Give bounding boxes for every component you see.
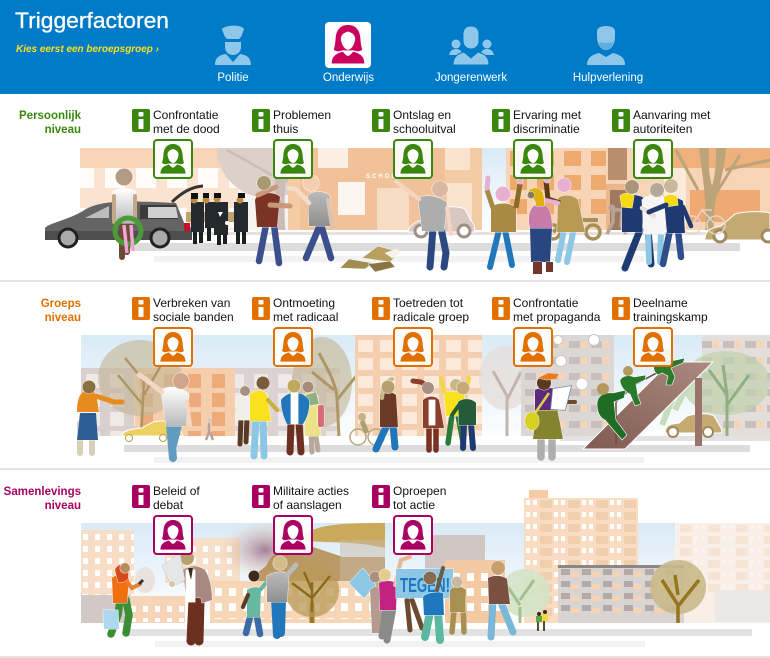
child and man <box>243 556 296 635</box>
woman in blue skirt <box>77 380 122 453</box>
man with wreath <box>112 168 141 257</box>
hearse <box>45 186 203 247</box>
scene backdrop: street 1: SCHOOL <box>366 174 404 180</box>
small pedestrians <box>536 610 548 631</box>
level heading: Samenlevings <box>4 486 81 498</box>
trigger: Confrontatie met propaganda: Confrontatie <box>513 296 579 310</box>
level heading: niveau <box>45 312 81 324</box>
trigger: Confrontatie met de dood: Confrontatie <box>153 108 219 122</box>
trigger: Ontslag en schooluitval: schooluitval <box>393 122 456 136</box>
trigger: Problemen thuis <box>252 108 331 178</box>
protesters with banner <box>349 557 466 640</box>
trigger: Confrontatie met propaganda: met propaganda <box>513 310 601 324</box>
scene backdrop: city <box>81 490 770 630</box>
trigger: Ervaring met discriminatie: Ervaring met <box>513 108 582 122</box>
row separators <box>0 280 770 658</box>
icon: Jongerenwerk <box>449 26 494 65</box>
trigger: Toetreden tot radicale groep <box>372 296 469 366</box>
police with detainee <box>620 179 691 268</box>
trigger: Problemen thuis: thuis <box>273 122 298 136</box>
trigger: Toetreden tot radicale groep: radicale groep <box>393 310 469 324</box>
trigger: Militaire acties of aanslagen <box>252 484 349 554</box>
trigger: Ontmoeting met radicaal: met radicaal <box>273 310 338 324</box>
waving man from behind <box>139 373 190 458</box>
road bands <box>124 436 770 463</box>
trigger: Oproepen tot actie: Oproepen <box>393 484 446 498</box>
label Politie: Politie <box>217 72 249 84</box>
header bar <box>0 0 770 94</box>
icon: Politie <box>215 26 251 65</box>
woman with phone <box>103 563 143 634</box>
parked cars and bikes <box>408 204 770 242</box>
trigger: Aanvaring met autoriteiten: autoriteiten <box>633 122 692 136</box>
label Jongerenwerk: Jongerenwerk <box>435 72 507 84</box>
scene backdrop: street 1 <box>80 148 770 244</box>
icon: Hulpverlening <box>587 26 625 65</box>
road bands <box>125 629 752 647</box>
instruction: Kies eerst een beroepsgroep › <box>16 44 159 55</box>
group: joining the radicals <box>376 378 476 450</box>
climbers with ropes <box>597 349 685 444</box>
trigger: Oproepen tot actie <box>372 484 446 554</box>
trigger: Beleid of debat: Beleid of <box>153 484 200 498</box>
waving man <box>396 181 451 267</box>
trigger: Ontslag en schooluitval: Ontslag en <box>393 108 451 122</box>
scene backdrop: street 2 <box>81 335 770 445</box>
icon: Onderwijs selected <box>325 22 371 68</box>
level heading: niveau <box>45 124 81 136</box>
label Onderwijs: Onderwijs <box>323 72 374 84</box>
trigger: Ervaring met discriminatie: discriminatie <box>513 122 580 136</box>
trigger: Toetreden tot radicale groep: Toetreden tot <box>393 296 464 310</box>
trigger: Ervaring met discriminatie <box>492 108 582 178</box>
trigger: Problemen thuis: Problemen <box>273 108 331 122</box>
trigger: Verbreken van sociale banden: Verbreken van <box>153 296 230 310</box>
panel: groeps niveau <box>41 296 770 463</box>
panel: persoonlijk niveau <box>19 108 770 274</box>
trigger: Aanvaring met autoriteiten <box>612 108 711 178</box>
trigger: Ontmoeting met radicaal: Ontmoeting <box>273 296 335 310</box>
panel: samenlevings niveau <box>4 484 770 647</box>
trigger: Beleid of debat: debat <box>153 498 184 512</box>
man on phone <box>488 561 513 637</box>
trigger: Verbreken van sociale banden <box>132 296 234 366</box>
level heading: Groeps <box>41 298 81 310</box>
title: Triggerfactoren <box>15 8 169 33</box>
pallbearers <box>186 193 248 245</box>
level heading: Persoonlijk <box>19 110 82 122</box>
banner text: TEGEN! <box>400 575 450 597</box>
man reading newspaper <box>162 551 212 641</box>
group: discrimination scene <box>487 177 585 274</box>
trigger: Ontslag en schooluitval <box>372 108 456 178</box>
trigger: Confrontatie met de dood: met de dood <box>153 122 220 136</box>
person handing out propaganda <box>525 373 575 457</box>
cars and small figures <box>122 413 722 445</box>
road bands <box>133 243 740 262</box>
trigger: Verbreken van sociale banden: sociale banden <box>153 310 234 324</box>
trigger: Deelname trainingskamp: trainingskamp <box>633 310 708 324</box>
trigger: Militaire acties of aanslagen: of aanslagen <box>273 498 342 512</box>
trigger: Aanvaring met autoriteiten: Aanvaring met <box>633 108 711 122</box>
level heading: niveau <box>45 500 81 512</box>
trigger: Ontmoeting met radicaal <box>252 296 338 366</box>
trigger: Deelname trainingskamp <box>612 296 708 366</box>
trigger: Militaire acties of aanslagen: Militaire acties <box>273 484 349 498</box>
trigger: Beleid of debat <box>132 484 200 554</box>
training ramp <box>583 362 713 449</box>
trigger: Oproepen tot actie: tot actie <box>393 498 435 512</box>
trigger: Confrontatie met propaganda <box>492 296 601 366</box>
scattered cardboard <box>340 246 400 272</box>
group: meeting a radical <box>236 376 324 456</box>
floating message bubbles <box>554 334 600 390</box>
trigger: Confrontatie met de dood <box>132 108 220 178</box>
trigger: Deelname trainingskamp: Deelname <box>633 296 688 310</box>
label Hulpverlening: Hulpverlening <box>573 72 643 84</box>
arguing man and youth <box>255 175 332 263</box>
